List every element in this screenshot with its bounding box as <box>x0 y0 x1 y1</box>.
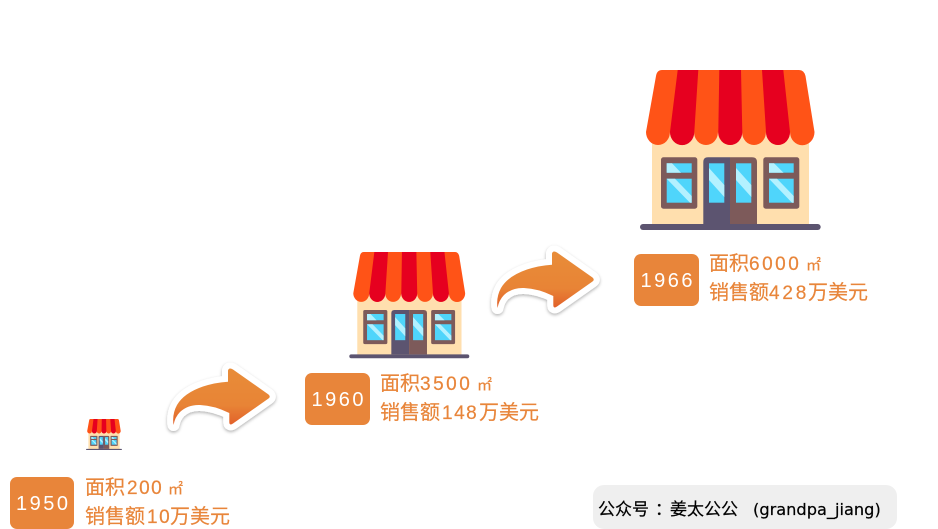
label: 1966 stats: 6000 <box>749 254 801 275</box>
label: 1960 stats: 3500 <box>420 374 472 395</box>
label: 1950 stats: 10 <box>147 507 171 528</box>
label: 1950 stats: ㎡ <box>168 481 183 498</box>
icon: small shop 1950 <box>86 419 122 450</box>
arrow: 1960 to 1966 <box>497 251 594 308</box>
credit pill: ： <box>655 500 672 519</box>
label: 1960 stats: 面积 <box>380 373 420 395</box>
credit pill <box>593 485 897 529</box>
label: 1960 stats <box>380 372 539 424</box>
year badge 1950 <box>10 477 74 529</box>
label: 1950 stats <box>85 476 230 528</box>
label: 1950 stats: 销售额 <box>85 506 145 528</box>
label: 1950 stats: 万美元 <box>170 505 230 528</box>
label: 1966 stats: ㎡ <box>806 257 821 274</box>
credit pill: 公众号 <box>598 500 649 519</box>
label: 1960 stats: 万美元 <box>479 401 539 424</box>
label: 1966 stats: 面积 <box>709 253 749 275</box>
credit pill: 姜太公公 <box>670 500 738 519</box>
icon: medium shop 1960 <box>349 252 469 358</box>
icon: large shop 1966 <box>640 70 821 230</box>
year badge 1960: 1960 <box>312 389 364 411</box>
year badge 1966 <box>634 254 699 306</box>
arrow: 1950 to 1960 <box>173 368 270 425</box>
label: 1966 stats: 万美元 <box>808 281 868 304</box>
label: 1950 stats: 面积 <box>85 477 125 499</box>
label: 1960 stats: 销售额 <box>380 402 440 424</box>
label: 1966 stats: 428 <box>769 283 809 304</box>
label: 1950 stats: 200 <box>127 478 163 499</box>
year badge 1960 <box>305 373 370 425</box>
year badge 1966: 1966 <box>640 270 692 292</box>
credit pill: (grandpa_jiang) <box>753 500 881 520</box>
label: 1966 stats <box>709 252 868 304</box>
label: 1960 stats: ㎡ <box>477 377 492 394</box>
label: 1960 stats: 148 <box>442 403 478 424</box>
year badge 1950: 1950 <box>16 493 68 515</box>
label: 1966 stats: 销售额 <box>709 282 769 304</box>
